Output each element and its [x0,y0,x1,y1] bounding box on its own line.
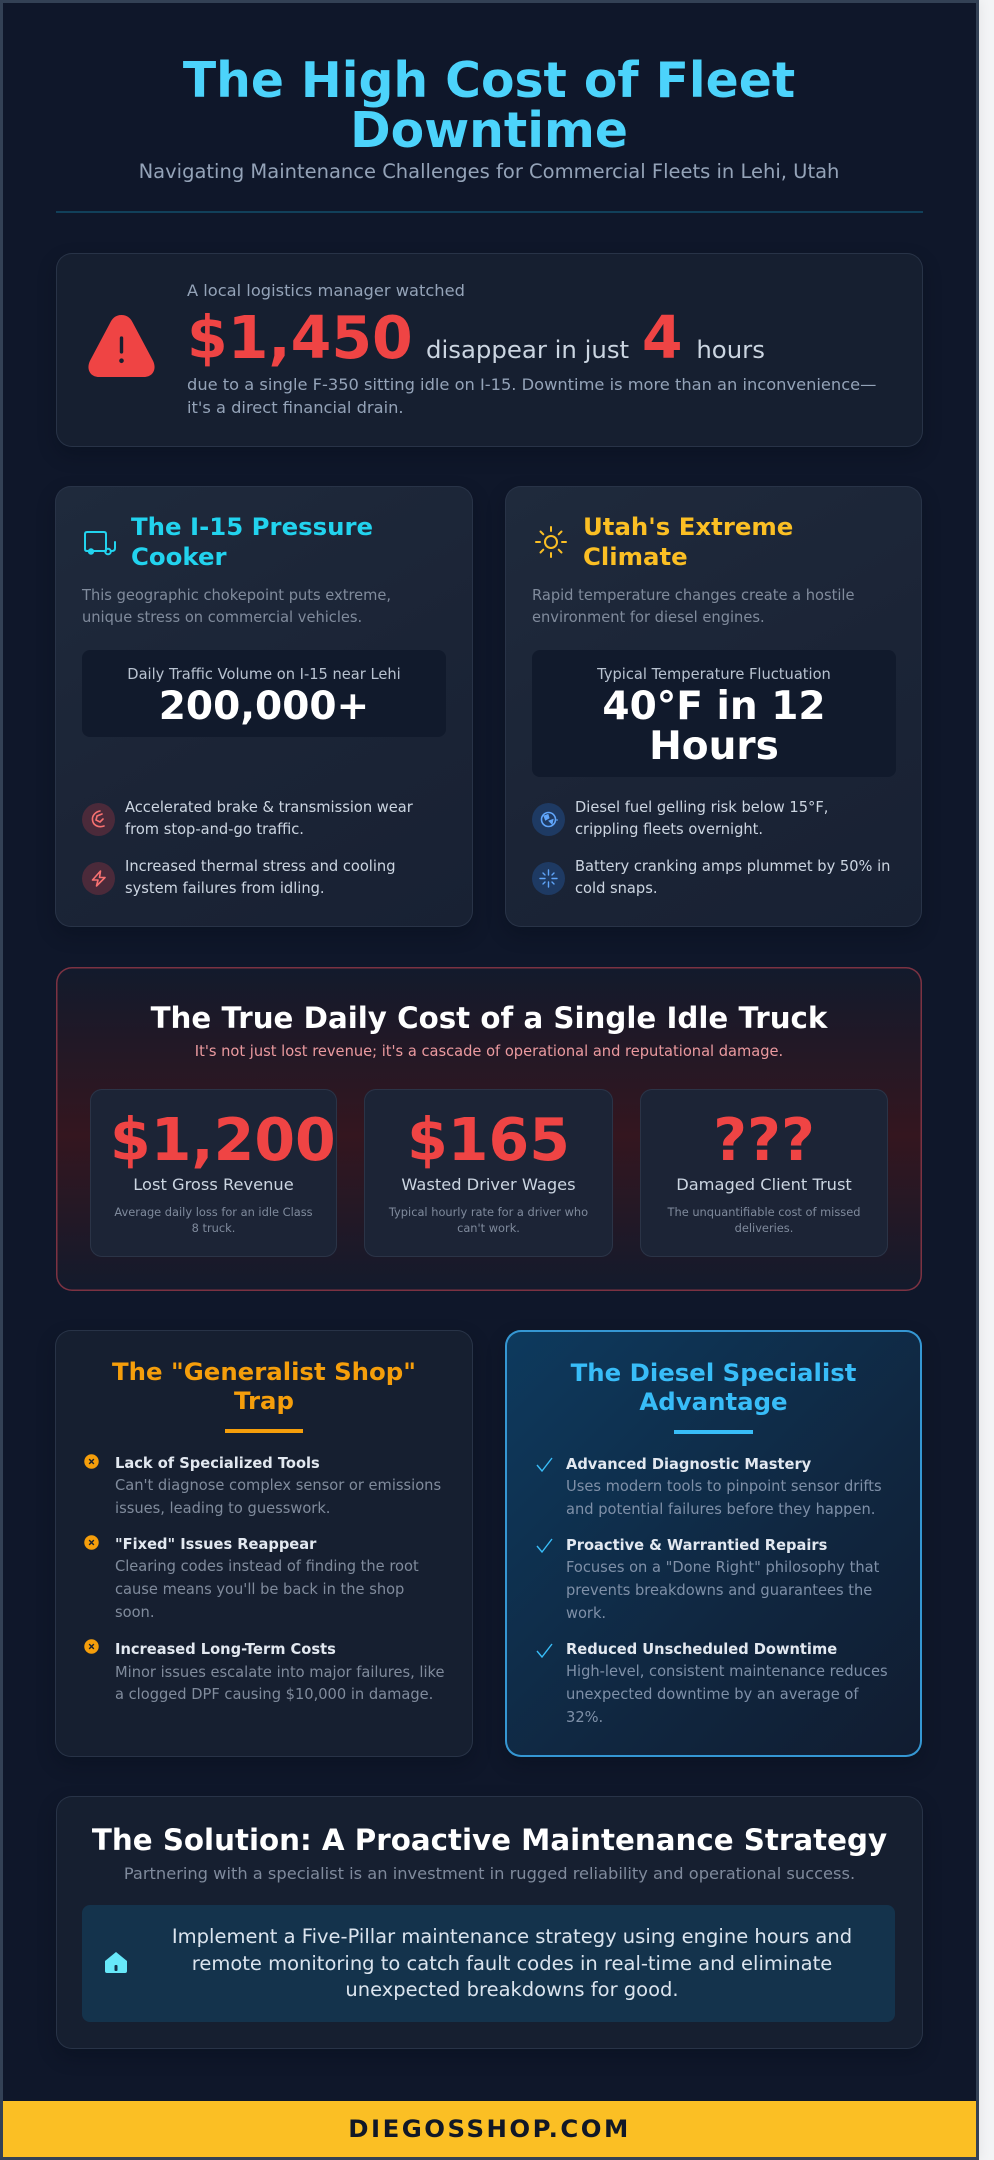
subheading: Partnering with a specialist is an investment in rugged reliability and operational success. [124,1864,855,1882]
cost figure: $1,200 [110,1106,336,1174]
panel: true daily cost [56,967,922,1291]
description: This geographic chokepoint puts extreme, [82,586,391,604]
cost note: 8 truck. [192,1221,235,1235]
item: lack of tools: Lack of Specialized Tools [115,1454,320,1472]
cost note: The unquantifiable cost of missed [668,1205,860,1219]
stat label: Typical Temperature Fluctuation [597,666,831,683]
item text: thermal stress: system failures from idling. [125,880,325,897]
heading: The "Generalist Shop" [112,1356,416,1386]
cost note: Average daily loss for an idle Class [114,1205,313,1219]
cost note [388,1205,588,1235]
icon: home [105,1952,127,1973]
stat number: 40°F in 12 [602,684,826,729]
heading [570,1358,856,1416]
item: diagnostic mastery [566,1456,882,1518]
item: warrantied repairs [566,1536,879,1622]
icon: sun [535,526,567,558]
title: The High Cost of Fleet [183,52,795,109]
cost note [114,1205,313,1235]
item: warrantied repairs: prevents breakdowns and guarantees the [566,1582,872,1599]
cost card: client trust [640,1089,888,1257]
hero explanation text: it's a direct financial drain. [187,398,404,417]
stat number [602,684,826,769]
heading: The I-15 Pressure [131,512,373,541]
cost figure: ??? [713,1106,815,1174]
description: unique stress on commercial vehicles. [82,609,362,626]
icon: fuel gelling globe [532,803,565,836]
heading: Advantage [639,1387,788,1416]
cost label: Wasted Driver Wages [401,1175,576,1194]
item text: battery [575,858,890,897]
item: diagnostic mastery: Advanced Diagnostic Mastery [566,1456,811,1472]
title: Downtime [350,102,628,159]
item text: fuel gelling: Diesel fuel gelling risk below 15°F, [575,798,828,816]
icon: x mark [84,1535,99,1550]
cost card: lost revenue [90,1089,337,1257]
icon: check [536,1644,552,1658]
heading: Climate [583,542,688,570]
cost note: Typical hourly rate for a driver who [389,1205,588,1219]
heading: Cooker [131,542,227,570]
hero explanation text [187,375,876,417]
hero big numbers: $1,450 disappear in just 4 hours [187,304,765,372]
heading: Utah's Extreme [583,512,793,541]
callout text: unexpected breakdowns for good. [345,1978,679,2001]
item: reduced downtime: 32%. [566,1709,603,1726]
icon: x mark [84,1639,99,1654]
item text: thermal stress [125,858,396,897]
cost figure: $165 [407,1106,570,1174]
item text: thermal stress: Increased thermal stress and cooling [125,858,396,874]
item: fixed issues: Clearing codes instead of finding the root [115,1558,419,1575]
section subheading: It's not just lost revenue; it's a cascade of operational and reputational damage. [195,1043,783,1060]
heading: Trap [234,1386,294,1415]
section heading: The True Daily Cost of a Single Idle Truck [151,1001,827,1035]
description: environment for diesel engines. [532,609,765,626]
stat label: Daily Traffic Volume on I-15 near Lehi [127,666,401,683]
item: long term costs: Increased Long-Term Costs [115,1641,336,1658]
cost label: Damaged Client Trust [676,1175,852,1194]
item: reduced downtime: High-level, consistent maintenance reduces [566,1663,888,1680]
description [532,586,854,626]
item text: brake wear: from stop-and-go traffic. [125,821,304,838]
description [82,586,391,626]
item: diagnostic mastery: Uses modern tools to pinpoint sensor drifts [566,1478,882,1495]
callout text [172,1925,852,2001]
callout: five-pillar strategy [82,1905,895,2022]
item: long term costs: a clogged DPF causing $10,000 in damage. [115,1686,433,1703]
stat number: Hours [649,724,779,769]
subtitle: Navigating Maintenance Challenges for Commercial Fleets in Lehi, Utah [139,160,839,183]
heading: The Diesel Specialist [571,1358,856,1386]
footer text: DIEGOSSHOP.COM [348,2114,631,2143]
item text: fuel gelling [575,798,828,838]
item: lack of tools: issues, leading to guesswork. [115,1500,330,1517]
callout text: remote monitoring to catch fault codes in real-time and eliminate [192,1952,832,1974]
cost note: deliveries. [735,1221,793,1235]
item: diagnostic mastery: and potential failures before they happen. [566,1501,875,1518]
callout text: Implement a Five-Pillar maintenance strategy using engine hours and [172,1925,852,1948]
item: reduced downtime: Reduced Unscheduled Downtime [566,1640,837,1658]
heading [583,512,793,570]
heading: The Solution: A Proactive Maintenance Strategy [92,1822,887,1856]
panel: the solution [56,1796,923,2049]
item text: fuel gelling: crippling fleets overnight. [575,821,763,838]
cost note: can't work. [457,1221,520,1235]
hero explanation text: due to a single F-350 sitting idle on I-15. Downtime is more than an inconvenience— [187,375,876,394]
item: reduced downtime [566,1640,888,1726]
cost note [668,1205,860,1235]
item: warrantied repairs: Proactive & Warrantied Repairs [566,1536,827,1554]
heading [112,1356,416,1415]
cost card: driver wages [364,1089,613,1257]
cost label: Lost Gross Revenue [133,1175,294,1194]
panel: Utah's extreme climate [505,486,922,927]
panel: I-15 pressure cooker [55,486,473,927]
item: fixed issues [115,1536,419,1621]
item: fixed issues: cause means you'll be back in the shop [115,1581,404,1598]
icon: lightning bolt [82,862,115,895]
icon: brake wear [82,803,115,836]
panel: hero loss callout [56,253,923,447]
icon: check [536,1538,552,1553]
stat box: temperature fluctuation [532,650,896,777]
item: long term costs [115,1641,445,1703]
icon: warning triangle [88,315,155,377]
item: reduced downtime: unexpected downtime by an average of [566,1686,858,1703]
panel: generalist shop trap [55,1330,473,1757]
item: long term costs: Minor issues escalate into major failures, like [115,1664,445,1681]
item text: battery: cold snaps. [575,880,657,897]
item: lack of tools [115,1454,441,1517]
item: warrantied repairs: Focuses on a "Done Right" philosophy that [566,1559,879,1576]
stat box: traffic volume [82,650,446,737]
stat number: 200,000+ [159,684,369,729]
heading [131,512,373,570]
title [183,52,795,159]
footer banner [3,2101,976,2157]
icon: x mark [84,1454,99,1469]
hero lead-in text: A local logistics manager watched [187,281,465,300]
item text: battery: Battery cranking amps plummet by 50% in [575,858,890,874]
item text: brake wear [125,798,413,838]
icon: cold snap [532,862,565,895]
item: fixed issues: soon. [115,1604,154,1621]
description: Rapid temperature changes create a hostile [532,586,854,604]
item: lack of tools: Can't diagnose complex sensor or emissions [115,1477,441,1494]
item text: brake wear: Accelerated brake & transmission wear [125,798,413,816]
panel: diesel specialist advantage [505,1330,922,1757]
icon: truck [84,531,116,556]
icon: check [536,1458,552,1472]
item: warrantied repairs: work. [566,1605,606,1622]
item: fixed issues: "Fixed" Issues Reappear [115,1536,316,1552]
